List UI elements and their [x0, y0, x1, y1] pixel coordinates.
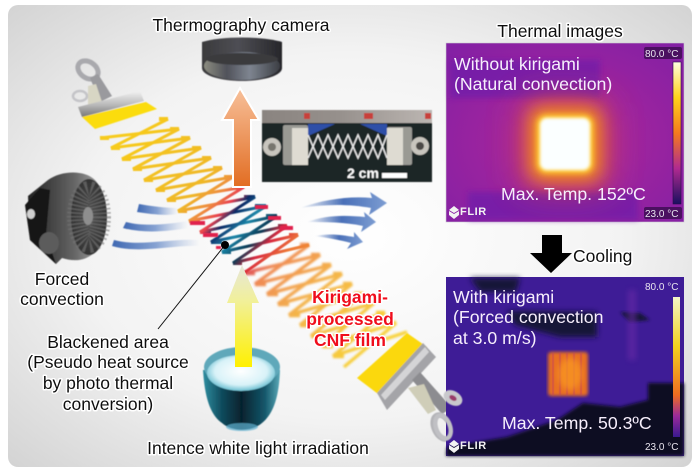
yellow arrow: incident light [227, 265, 259, 367]
kirigami film strip [100, 119, 407, 367]
label: forced convection: Forced [35, 269, 89, 289]
ruler [262, 110, 432, 123]
colour scale: 23.0 °C [645, 209, 678, 220]
text: panel caption: at 3.0 m/s) [453, 328, 537, 348]
icon: white light lamp [203, 347, 280, 431]
label: kirigami film: CNF film [314, 330, 386, 350]
spring [308, 135, 387, 158]
clip rings overlapping panel [432, 387, 465, 441]
panel: thermal image without kirigami [446, 43, 684, 222]
darker upper region [450, 60, 600, 98]
blue streaks: incoming air flow [112, 204, 200, 249]
scale bar: 2 cm [347, 165, 379, 181]
crimson film ends in blackened area [190, 205, 293, 249]
colour scale: 80.0 °C [645, 49, 678, 60]
label: blackened area [27, 332, 189, 414]
label: blackened area: (Pseudo heat source [27, 352, 189, 372]
panel: thermal image with kirigami [446, 277, 684, 456]
label: forced convection: convection [20, 289, 104, 309]
arrow: cooling: Cooling [573, 246, 632, 266]
text: panel caption: (Natural convection) [454, 74, 612, 94]
label: blackened area: by photo thermal [43, 373, 173, 393]
label: blackened area: Blackened area [47, 332, 169, 352]
text: panel caption: (Forced convection [453, 307, 603, 327]
icon: fan [25, 172, 107, 264]
callout line: blackened area pointer [158, 241, 229, 329]
top binder clip [73, 57, 157, 129]
sample clips [263, 125, 429, 165]
heading: thermography camera: Thermography camera [152, 15, 330, 35]
colour scale [644, 47, 682, 220]
blue backing [308, 124, 387, 136]
label: kirigami film [306, 287, 394, 350]
label: kirigami film: Kirigami- [312, 287, 388, 307]
photo inset: kirigami film sample [262, 110, 432, 182]
label: blackened area: conversion) [63, 394, 153, 414]
text: panel caption [453, 287, 652, 433]
hot spot [524, 102, 606, 186]
label: kirigami film: processed [306, 309, 394, 329]
text: panel caption [454, 54, 646, 204]
text: panel caption: Max. Temp. 50.3ºC [502, 413, 652, 433]
lighter purple band [628, 290, 636, 360]
arrow: cooling [530, 235, 632, 273]
dark background shapes [470, 278, 650, 337]
dark foreground staircase [446, 383, 684, 456]
bottom binder clip [357, 333, 455, 442]
orange arrow: emitted heat [222, 88, 259, 187]
thermography camera icon [202, 38, 282, 81]
upper film section [100, 119, 309, 273]
text: panel caption: Max. Temp. 152ºC [501, 184, 646, 204]
colour scale: 80.0 °C [645, 282, 678, 293]
label: intense light: Intence white light irradiation [147, 438, 369, 458]
logo: FLIR [449, 206, 487, 219]
blue arrows: outgoing air flow [300, 192, 387, 249]
colour scale [645, 282, 680, 453]
logo: FLIR: FLIR [460, 440, 487, 452]
logo: FLIR [449, 440, 487, 453]
darker lower region [468, 192, 638, 220]
text: panel caption: Without kirigami [454, 54, 580, 74]
heading: thermal images: Thermal images [497, 21, 623, 41]
label: forced convection [20, 269, 104, 309]
logo: FLIR: FLIR [460, 206, 487, 218]
text: panel caption: With kirigami [453, 287, 554, 307]
colour scale: 23.0 °C [645, 442, 678, 453]
lower film section [244, 245, 407, 367]
hot kirigami pattern [548, 352, 588, 396]
